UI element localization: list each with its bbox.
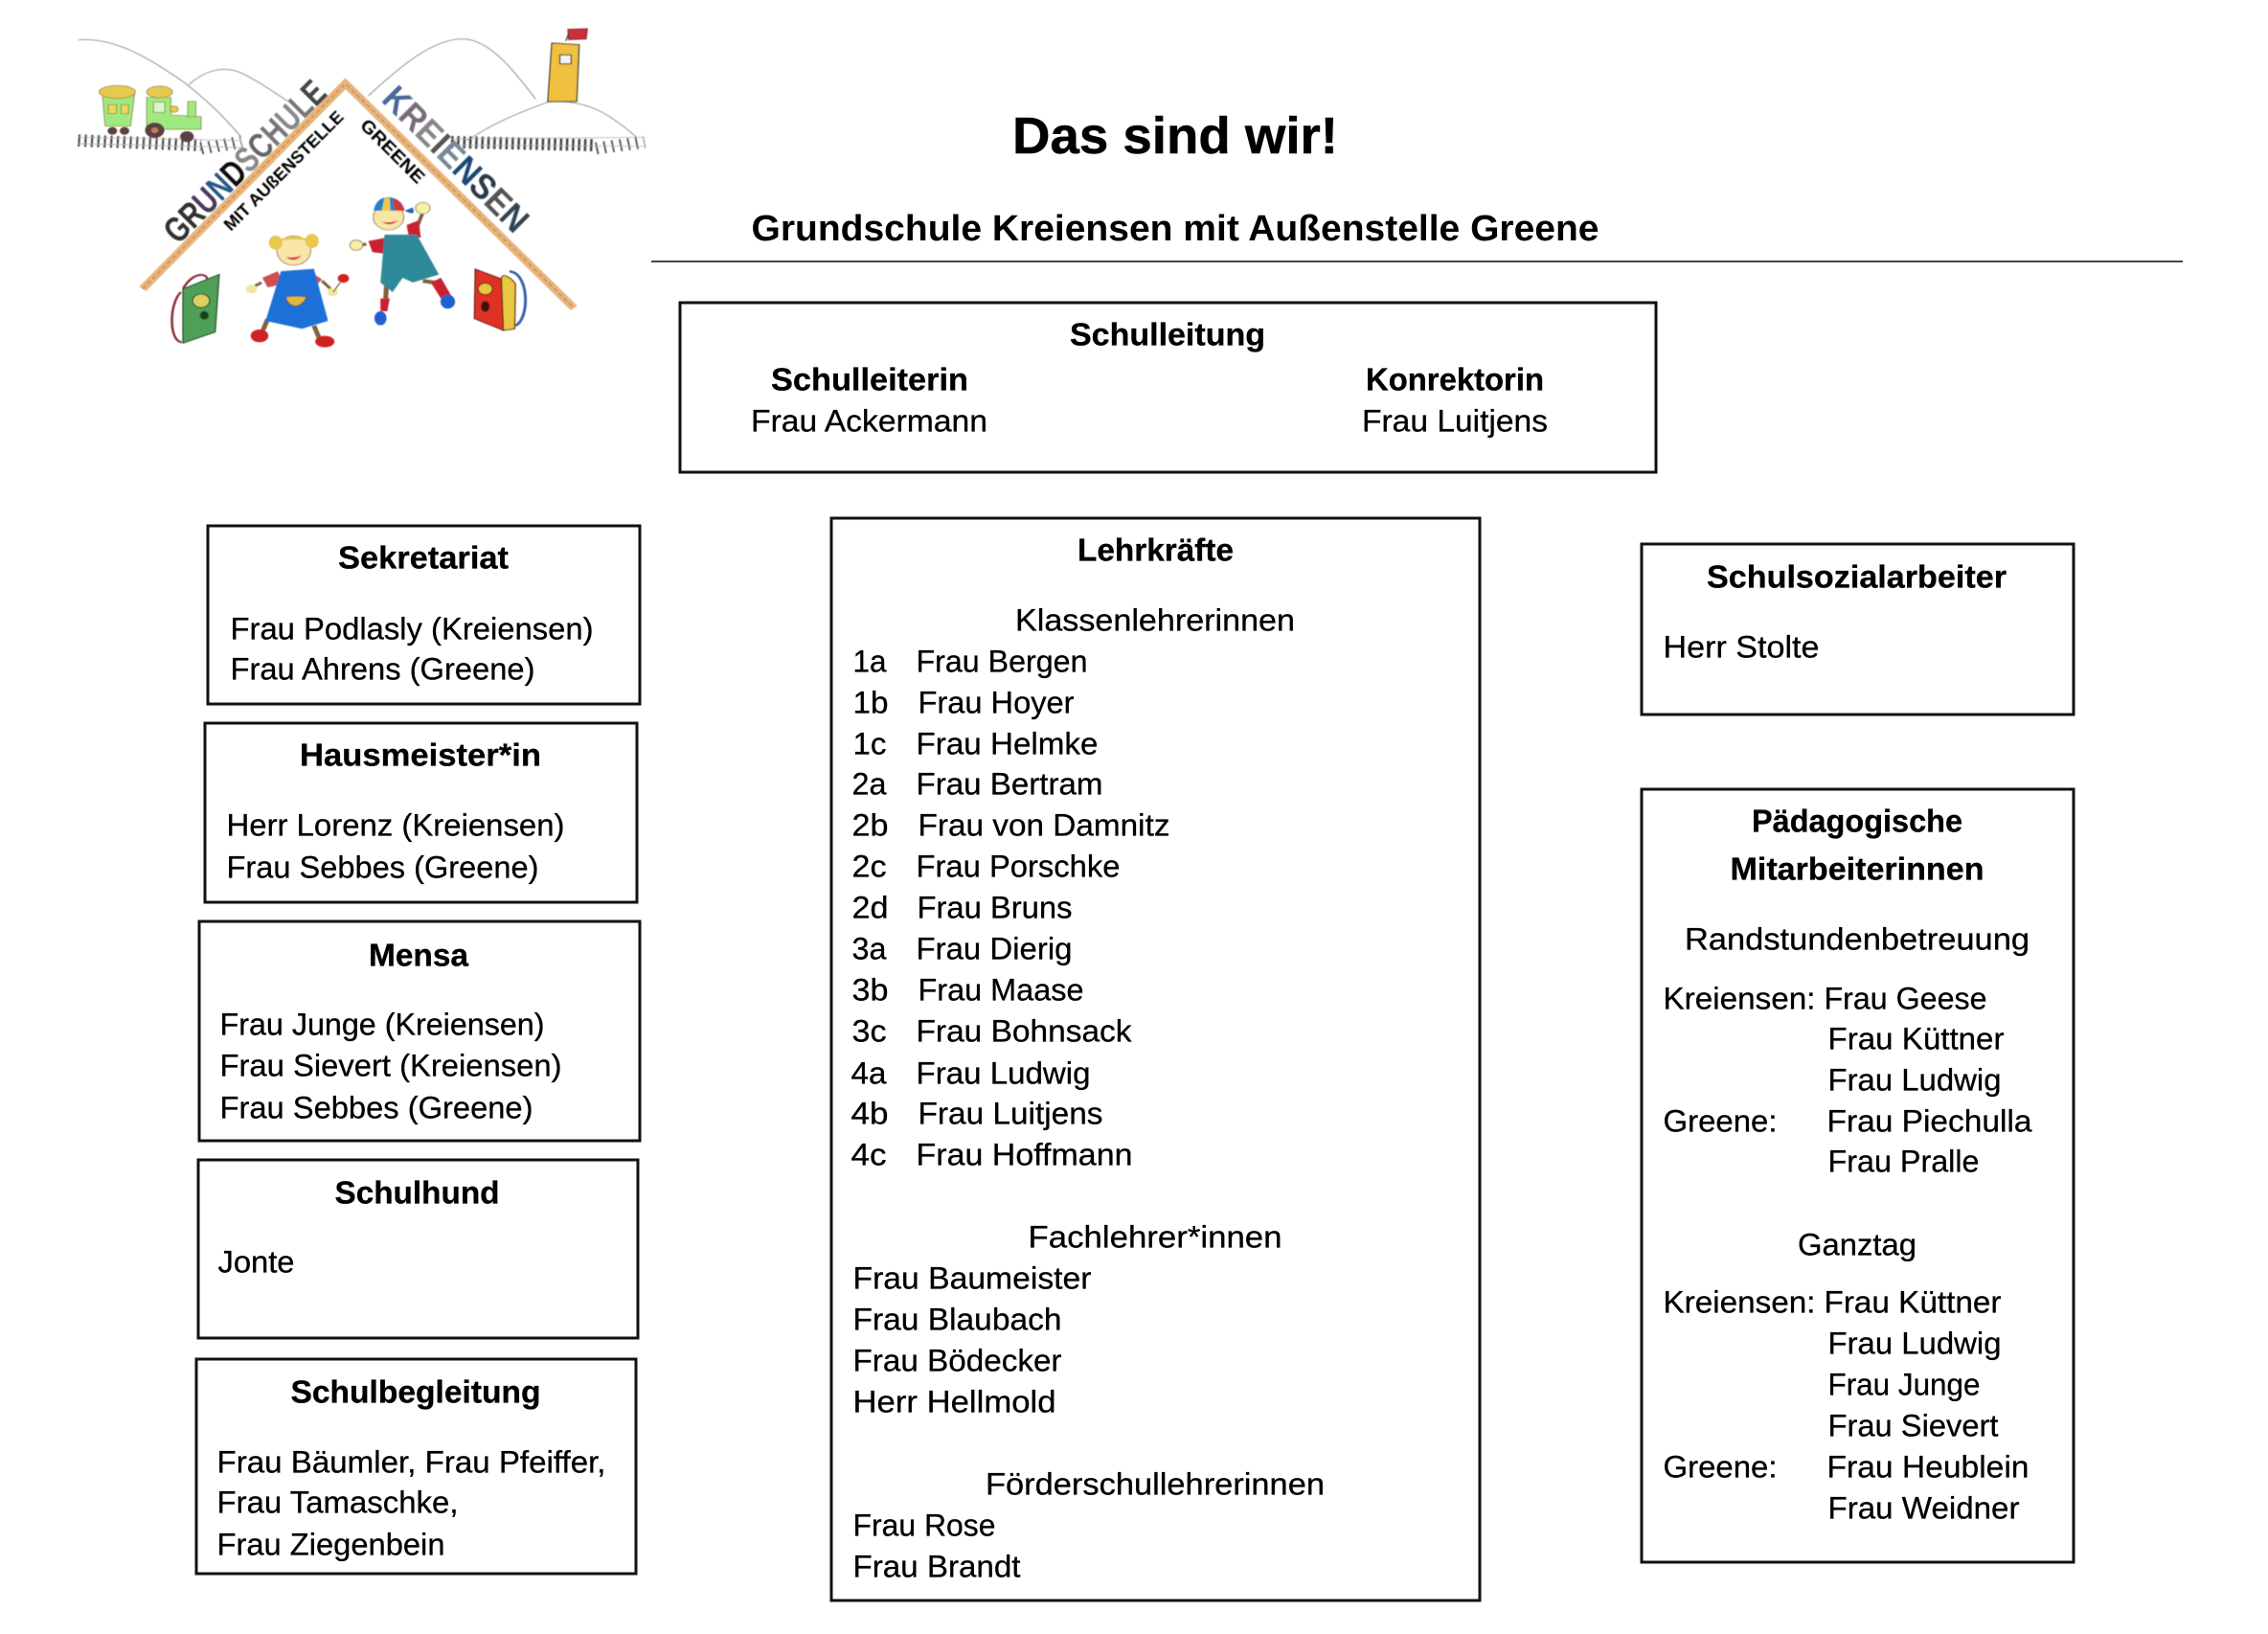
backpack green	[172, 275, 219, 343]
list: Randstundenbetreuung: Greene:	[1663, 1103, 1778, 1139]
Konrektorin: Frau Luitjens	[1362, 403, 1548, 439]
class teacher list: Frau Porschke	[916, 849, 1121, 884]
logo text: GREENE: GREENE	[355, 116, 428, 188]
panel: Schulbegleitung	[196, 1359, 636, 1574]
names: Mensa: Frau Junge (Kreiensen)	[220, 1007, 544, 1042]
train	[99, 85, 201, 129]
list: Ganztag: Frau Heublein	[1827, 1449, 2029, 1485]
panel: Lehrkräfte	[831, 518, 1480, 1600]
heading: Pädagogische Mitarbeiterinnen: Pädagogische	[1752, 804, 1962, 839]
heading: Schulleitung: Schulleitung	[1070, 317, 1265, 352]
class teacher list: 2d	[852, 890, 889, 925]
names: Mensa: Frau Sievert (Kreiensen)	[220, 1048, 561, 1083]
list: Ganztag: Frau Küttner	[1824, 1284, 2002, 1320]
heading: Schulbegleitung: Schulbegleitung	[291, 1374, 540, 1410]
tower	[548, 29, 587, 102]
list: Randstundenbetreuung: Frau Ludwig	[1827, 1062, 2002, 1098]
class teacher list: 3b	[852, 972, 889, 1008]
heading: Pädagogische Mitarbeiterinnen	[1730, 804, 1984, 887]
class teacher list: Frau Bertram	[916, 766, 1103, 802]
logo text: MIT AUSSENSTELLE: MIT AUßENSTELLE	[220, 107, 348, 235]
list: Randstundenbetreuung: Frau Küttner	[1827, 1021, 2005, 1056]
class teacher list: 4c	[850, 1137, 887, 1172]
backpack red	[474, 269, 526, 330]
subject teacher list	[852, 1260, 1092, 1419]
heading: Schulhund: Schulhund	[335, 1175, 500, 1211]
class teacher list: Frau von Damnitz	[918, 807, 1170, 843]
class teacher list: 4a	[850, 1055, 887, 1091]
roof	[143, 83, 574, 308]
heading: Schulsozialarbeiter: Schulsozialarbeiter	[1707, 559, 2007, 595]
title: Das sind wir!	[1012, 107, 1338, 165]
list: Ganztag: Frau Ludwig	[1827, 1326, 2002, 1361]
subheading: Randstundenbetreuung: Randstundenbetreuung	[1685, 921, 2030, 957]
panel: Hausmeister*in	[205, 723, 637, 902]
panel: Schulsozialarbeiter	[1642, 544, 2074, 715]
names: Schulbegleitung: Frau Bäumler, Frau Pfeiffer,	[216, 1444, 605, 1480]
subject teacher list: Frau Bödecker	[852, 1343, 1062, 1378]
class teacher list	[850, 644, 1170, 1172]
list: Ganztag	[1663, 1284, 2029, 1526]
logo text: GRUNDSCHULE: GRUNDSCHULE	[156, 73, 334, 251]
special needs teacher list: Frau Brandt	[852, 1549, 1021, 1584]
class teacher list: Frau Bruns	[918, 890, 1073, 925]
subject teacher list: Frau Baumeister	[852, 1260, 1092, 1296]
class teacher list: Frau Maase	[918, 972, 1084, 1008]
class teacher list: 1c	[852, 726, 887, 761]
class teacher list: 1a	[852, 644, 887, 679]
list: Ganztag: Frau Weidner	[1827, 1490, 2020, 1526]
class teacher list: 3a	[852, 931, 887, 966]
list: Ganztag: Greene:	[1663, 1449, 1778, 1485]
girl	[246, 234, 349, 348]
Schulleiterin	[751, 362, 987, 439]
class teacher list: 3c	[852, 1013, 887, 1049]
heading: Hausmeister*in: Hausmeister*in	[300, 738, 541, 773]
names: Schulbegleitung: Frau Ziegenbein	[216, 1527, 444, 1562]
logo drawing	[79, 29, 645, 348]
names: Sekretariat: Frau Ahrens (Greene)	[230, 651, 534, 687]
name: Jonte: Jonte	[218, 1244, 295, 1280]
Konrektorin: Konrektorin	[1366, 362, 1544, 397]
class teacher list: 4b	[850, 1096, 889, 1131]
class teacher list: 2c	[852, 849, 887, 884]
names: Hausmeister*in: Frau Sebbes (Greene)	[226, 850, 538, 885]
panel: Sekretariat	[208, 526, 640, 704]
list: Randstundenbetreuung	[1663, 981, 2032, 1179]
list: Randstundenbetreuung: Kreiensen:	[1663, 981, 1816, 1016]
subheading: Förderschullehrerinnen: Förderschullehrerinnen	[986, 1466, 1325, 1502]
special needs teacher list: Frau Rose	[852, 1508, 996, 1543]
Schulleiterin: Schulleiterin	[771, 362, 968, 397]
list: Ganztag: Frau Junge	[1827, 1367, 1981, 1402]
class teacher list: Frau Bergen	[916, 644, 1088, 679]
subheading: Klassenlehrerinnen: Klassenlehrerinnen	[1015, 602, 1295, 638]
names: Sekretariat	[230, 611, 594, 687]
list: Ganztag: Kreiensen:	[1663, 1284, 1816, 1320]
logo text: KREIENSEN: KREIENSEN	[374, 79, 536, 240]
logo: Grundschule Kreiensen	[79, 29, 645, 348]
subheading: Fachlehrer*innen: Fachlehrer*innen	[1029, 1219, 1281, 1255]
names: Hausmeister*in	[226, 807, 565, 885]
list: Ganztag: Frau Sievert	[1827, 1408, 1998, 1443]
class teacher list: Frau Hoffmann	[916, 1137, 1132, 1172]
class teacher list: 1b	[852, 685, 889, 720]
panel: Mensa	[199, 921, 640, 1141]
class teacher list: 2a	[852, 766, 887, 802]
list: Randstundenbetreuung: Frau Piechulla	[1827, 1103, 2032, 1139]
subject teacher list: Herr Hellmold	[852, 1384, 1055, 1419]
subject teacher list: Frau Blaubach	[852, 1302, 1061, 1337]
special needs teacher list	[852, 1508, 1021, 1584]
names: Schulbegleitung: Frau Tamaschke,	[216, 1485, 458, 1520]
subtitle: Grundschule Kreiensen mit Außenstelle Greene	[751, 209, 1599, 249]
class teacher list: Frau Luitjens	[918, 1096, 1103, 1131]
heading: Sekretariat: Sekretariat	[338, 540, 509, 576]
class teacher list: Frau Dierig	[916, 931, 1073, 966]
names: Sekretariat: Frau Podlasly (Kreiensen)	[230, 611, 594, 647]
list: Randstundenbetreuung: Frau Geese	[1824, 981, 1986, 1016]
Schulleiterin: Frau Ackermann	[751, 403, 987, 439]
class teacher list: Frau Ludwig	[916, 1055, 1090, 1091]
Konrektorin	[1362, 362, 1548, 439]
subheading: Ganztag: Ganztag	[1798, 1227, 1916, 1262]
panel: Schulleitung	[680, 303, 1656, 472]
class teacher list: Frau Hoyer	[918, 685, 1075, 720]
class teacher list: Frau Helmke	[916, 726, 1098, 761]
names: Mensa	[220, 1007, 561, 1125]
class teacher list: Frau Bohnsack	[916, 1013, 1132, 1049]
names: Schulbegleitung	[216, 1444, 605, 1562]
class teacher list: 2b	[852, 807, 889, 843]
names: Mensa: Frau Sebbes (Greene)	[220, 1090, 533, 1125]
panel: Pädagogische Mitarbeiterinnen	[1642, 789, 2074, 1562]
boy	[350, 197, 455, 326]
heading: Mensa: Mensa	[369, 938, 469, 973]
heading: Pädagogische Mitarbeiterinnen: Mitarbeiterinnen	[1730, 851, 1984, 887]
name: Herr Stolte: Herr Stolte	[1663, 629, 1820, 665]
list: Randstundenbetreuung: Frau Pralle	[1827, 1144, 1979, 1179]
names: Hausmeister*in: Herr Lorenz (Kreiensen)	[226, 807, 565, 843]
heading: Lehrkräfte: Lehrkräfte	[1077, 533, 1234, 568]
panel: Schulhund	[198, 1160, 638, 1338]
